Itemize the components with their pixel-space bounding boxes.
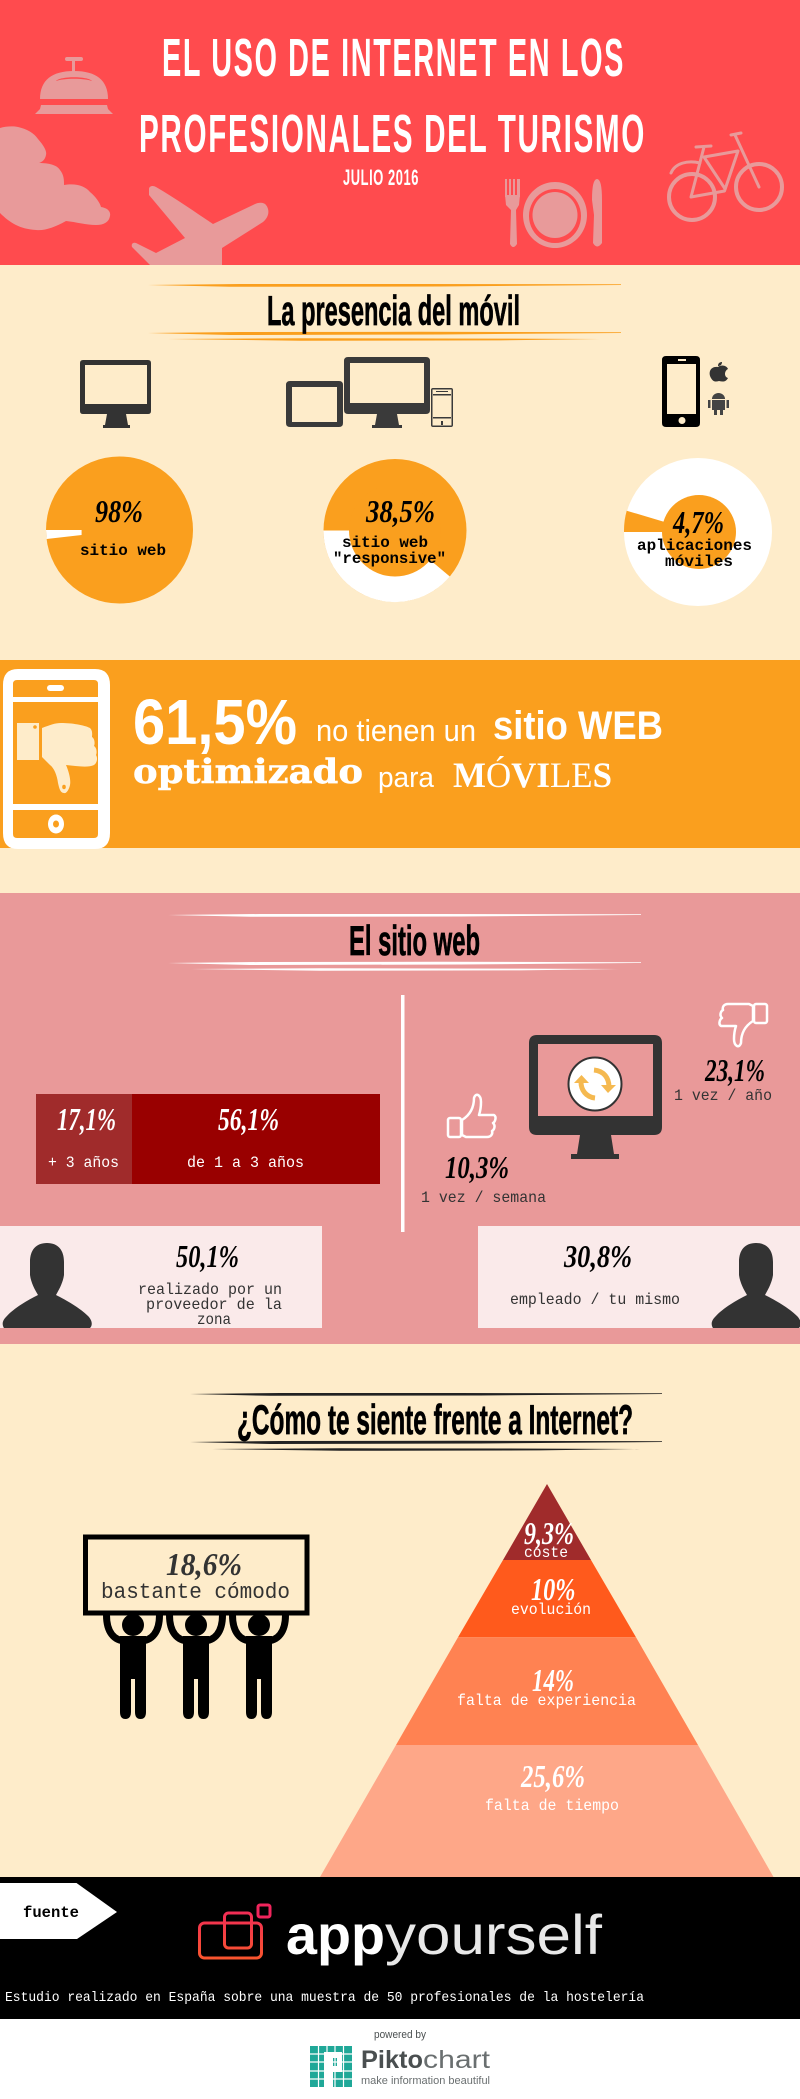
text: tagline: make information beautiful <box>361 2075 490 2087</box>
icon: responsive devices <box>286 357 453 428</box>
description <box>138 1281 282 1329</box>
icon: phone with thumbs down <box>3 669 110 849</box>
icon: airplane <box>132 186 268 265</box>
icon: person <box>3 1243 92 1328</box>
tag: fuente <box>0 1883 117 1939</box>
icon: smartphone with apple and android <box>662 356 729 427</box>
text: piktochart wordmark <box>361 2046 490 2074</box>
panel: footer source <box>0 1877 800 2019</box>
heading: La presencia del móvil <box>267 287 520 334</box>
tier: falta de experiencia <box>396 1637 698 1745</box>
stat: 30,8% <box>563 1238 632 1274</box>
figures <box>106 1614 286 1719</box>
stacked bar <box>36 1094 380 1184</box>
icon: desktop monitor <box>80 360 151 428</box>
logo: appyourself <box>200 1903 602 1966</box>
label: 1 vez / año: 1 vez / año <box>674 1087 772 1105</box>
date: JULIO 2016 <box>343 165 419 190</box>
label: móviles <box>665 553 733 571</box>
sign <box>86 1537 307 1613</box>
stat: 50,1% <box>176 1238 239 1274</box>
logo: appyourself: app <box>286 1903 385 1966</box>
segment: de 1 a 3 años: 56,1% <box>218 1101 279 1137</box>
tier: coste: 9,3% <box>524 1515 574 1551</box>
value: 98% <box>95 493 143 529</box>
tier: evolucion <box>458 1560 636 1637</box>
panel: orange banner <box>0 660 800 849</box>
big stat: 61,5% <box>133 686 297 758</box>
chart: pie 38,5% <box>323 459 466 602</box>
segment: + 3 años: 17,1% <box>57 1101 116 1137</box>
brush lines white <box>168 914 641 971</box>
stat: 18,6% <box>166 1546 242 1582</box>
segment: + 3 años <box>36 1094 132 1184</box>
tier: falta de tiempo: 25,6% <box>520 1758 585 1794</box>
section: como te sientes <box>86 1393 774 1877</box>
tier: falta de experiencia: falta de experiencia <box>457 1692 636 1710</box>
chart: pie 98% <box>46 456 193 604</box>
tier: falta de experiencia: 14% <box>532 1662 574 1698</box>
tag: fuente: fuente <box>23 1904 79 1922</box>
description: realizado por un <box>138 1281 282 1299</box>
description: empleado / tu mismo <box>510 1291 680 1309</box>
label: 1 vez / semana: 1 vez / semana <box>421 1189 546 1207</box>
text: moviles: MÓVILES <box>453 755 612 795</box>
logo: appyourself: yourself <box>385 1903 602 1966</box>
tier: coste <box>503 1484 591 1562</box>
icon: piktochart logo <box>310 2046 352 2087</box>
panel: powered by piktochart <box>0 2019 800 2099</box>
icon: service bell <box>35 57 113 114</box>
tier: evolucion: 10% <box>531 1571 576 1607</box>
label: aplicaciones <box>637 537 752 555</box>
label <box>333 534 446 568</box>
segment: + 3 años: + 3 años <box>48 1154 119 1172</box>
section: la presencia del movil <box>46 284 772 606</box>
icon: bicycle <box>669 133 782 220</box>
icon: cloud <box>0 126 110 230</box>
label <box>637 537 752 571</box>
chart: pie 4,7% <box>624 458 772 606</box>
value: 38,5% <box>365 493 435 529</box>
tier: coste: coste <box>524 1544 568 1562</box>
text: sitio web: sitio WEB <box>493 704 663 748</box>
card: proveedor <box>0 1226 322 1329</box>
card: empleado <box>478 1226 800 1328</box>
panel: el sitio web <box>0 893 800 1344</box>
label: sitio web <box>342 534 428 552</box>
text: piktochart wordmark: Pikto <box>361 2046 423 2074</box>
text: piktochart wordmark: chart <box>423 2046 490 2074</box>
label: "responsive" <box>333 550 446 568</box>
label: sitio web <box>80 542 166 560</box>
panel: header <box>0 0 800 265</box>
icon: fork, plate and knife <box>505 179 602 248</box>
segment: de 1 a 3 años <box>132 1094 380 1184</box>
tier: evolucion: evolución <box>511 1601 591 1619</box>
brush lines orange <box>148 284 621 341</box>
text: optimizado: optimizado <box>133 752 363 792</box>
icon: monitor with refresh <box>529 1035 662 1159</box>
text: no tienen un: no tienen un <box>316 713 476 748</box>
text: para: para <box>378 762 435 794</box>
text: powered by: powered by <box>374 2029 426 2041</box>
value: 4,7% <box>672 504 724 540</box>
icon: thumbs down <box>719 1004 767 1046</box>
label: bastante cómodo <box>101 1580 290 1605</box>
icon: three people holding sign <box>86 1537 307 1719</box>
heading: El sitio web <box>349 917 480 964</box>
description: zona <box>197 1311 231 1329</box>
brush lines dark <box>190 1393 662 1451</box>
icon: person <box>712 1243 800 1328</box>
segment: de 1 a 3 años: de 1 a 3 años <box>187 1154 304 1172</box>
tier: falta de tiempo: falta de tiempo <box>485 1797 619 1815</box>
icon: thumbs up <box>448 1095 496 1137</box>
text: study note: Estudio realizado en España sobre una muestra de 50 profesionales de la hostelería <box>5 1990 644 2006</box>
divider <box>401 995 404 1232</box>
stat: 23,1%: 23,1% <box>704 1052 765 1088</box>
description: proveedor de la <box>146 1296 282 1314</box>
chart: pyramid <box>320 1484 774 1877</box>
tier: falta de tiempo <box>320 1745 774 1877</box>
stat: 10,3%: 10,3% <box>445 1149 509 1185</box>
